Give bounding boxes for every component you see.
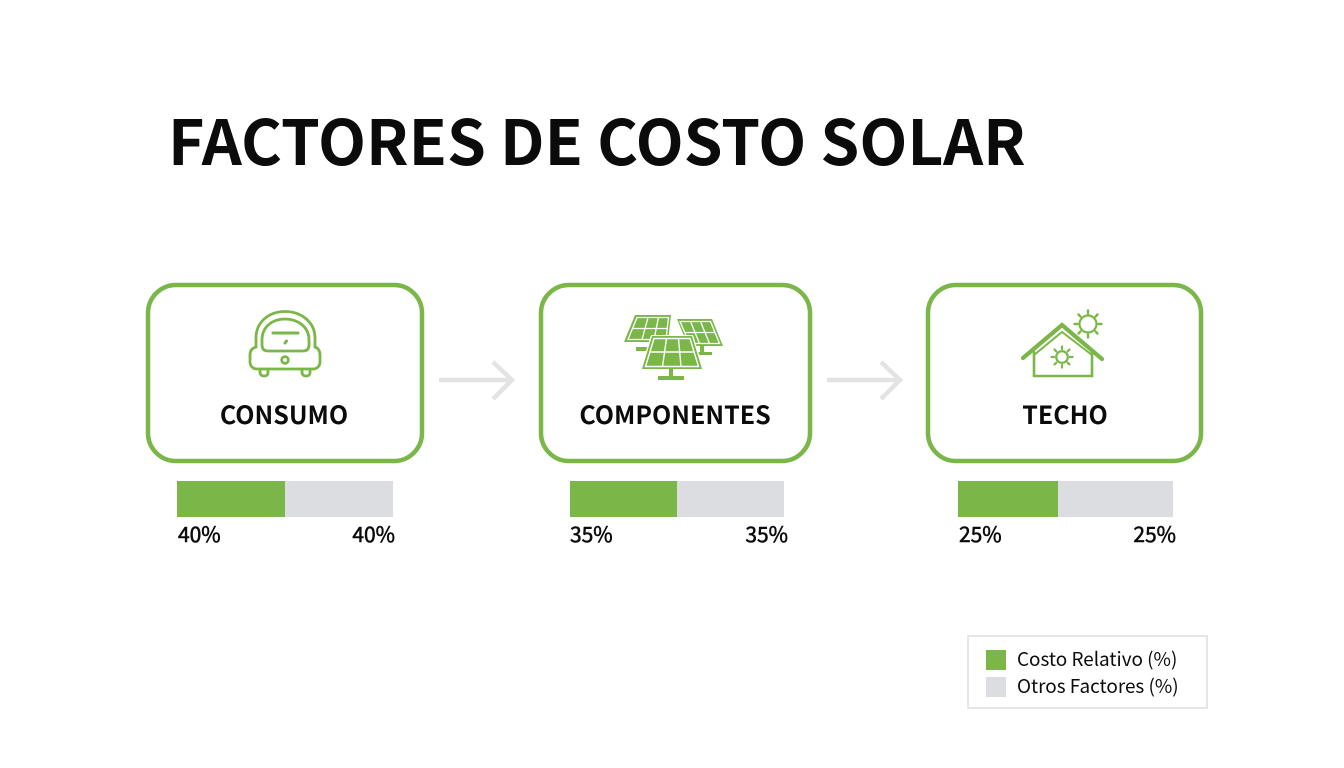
panel: techo (928, 285, 1201, 461)
bar chart: componentes: 35% (745, 519, 788, 549)
panel: consumo (148, 285, 422, 461)
arrow: componentes to techo (827, 362, 900, 399)
bar chart: consumo: 40% (178, 519, 221, 549)
legend: Costo Relativo (%) (1017, 645, 1177, 672)
bar chart: techo: 25% (959, 519, 1002, 549)
icon: house with sun (1023, 310, 1102, 376)
label: componentes: COMPONENTES (579, 396, 771, 432)
legend (968, 636, 1207, 708)
arrow: consumo to componentes (439, 362, 512, 399)
title: FACTORES DE COSTO SOLAR (168, 93, 1026, 183)
icon: electric meter (250, 312, 320, 376)
label: techo: TECHO (1022, 396, 1108, 432)
bar chart: techo: 25% (1133, 519, 1176, 549)
bar chart: techo (958, 481, 1176, 549)
label: consumo: CONSUMO (220, 396, 348, 432)
icon: solar panels (624, 315, 723, 380)
legend: Otros Factores (%) (1017, 672, 1179, 699)
bar chart: consumo (177, 481, 395, 549)
bar chart: consumo: 40% (352, 519, 395, 549)
panel: componentes (541, 285, 810, 461)
bar chart: componentes: 35% (570, 519, 613, 549)
bar chart: componentes (570, 481, 788, 549)
